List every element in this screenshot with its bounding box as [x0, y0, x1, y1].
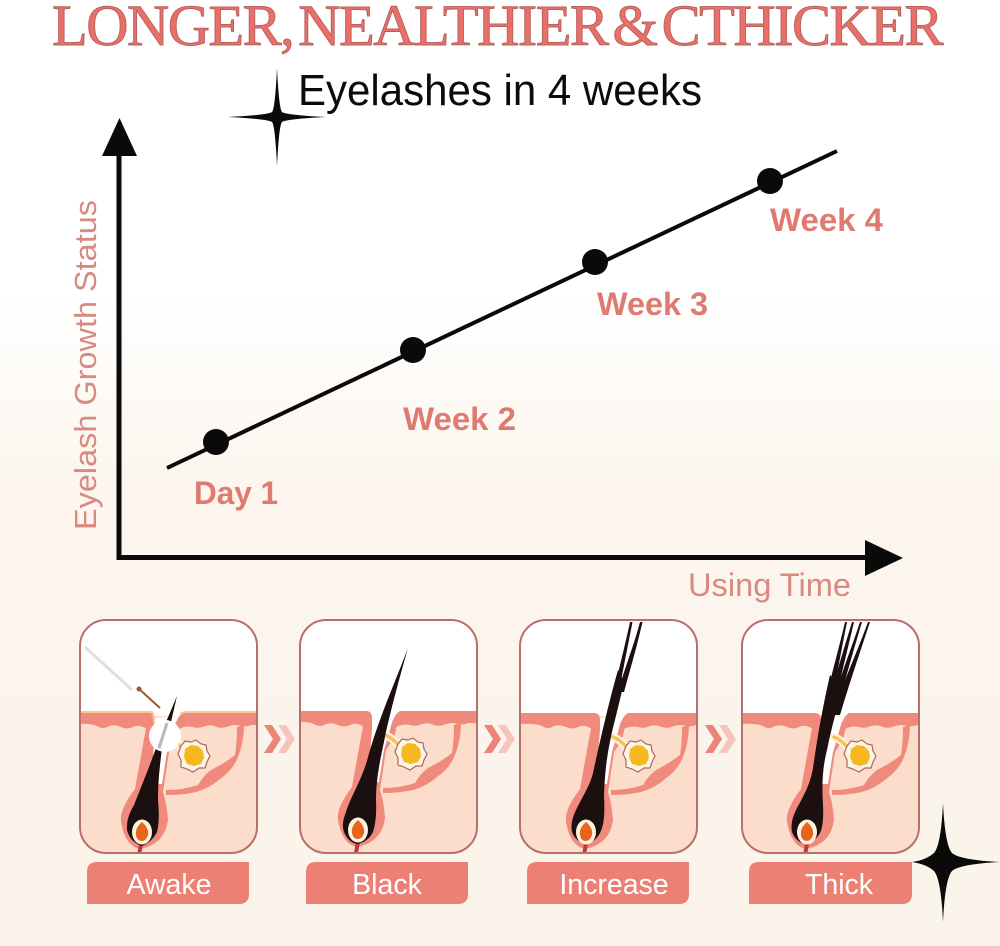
label: Black — [306, 862, 468, 904]
hair — [572, 622, 642, 844]
arrow: Awake to Black — [264, 725, 295, 753]
panel: Increase — [519, 619, 698, 854]
x axis label: Using Time — [688, 567, 851, 603]
label: Increase: Increase — [559, 869, 669, 901]
icon: sparkle near subtitle — [228, 68, 326, 166]
point: Week 3: Week 3 — [597, 286, 708, 322]
hair — [792, 622, 870, 844]
label: Awake: Awake — [126, 869, 212, 901]
label: Thick — [749, 862, 912, 904]
point: Week 4 — [757, 168, 883, 238]
trend line — [167, 151, 837, 468]
point: Week 3 — [582, 249, 708, 322]
point: Week 2: Week 2 — [403, 401, 516, 437]
line chart — [68, 118, 903, 603]
yellow halo on skin — [80, 712, 257, 724]
point: Day 1 — [194, 429, 278, 511]
point: Week 2 — [400, 337, 516, 437]
point: Day 1: Day 1 — [194, 475, 278, 511]
hair — [343, 648, 408, 844]
icon: sparkle bottom right — [912, 803, 1000, 922]
arrow: Black to Increase — [484, 725, 515, 753]
x axis arrow — [117, 540, 903, 576]
label: Black: Black — [352, 869, 423, 901]
panel: Awake — [79, 619, 258, 854]
arrow: Increase to Thick — [705, 725, 736, 753]
hair and applicator — [85, 647, 181, 846]
y axis arrow — [102, 118, 137, 560]
panel: Thick — [741, 619, 920, 854]
point: Week 4: Week 4 — [770, 202, 883, 238]
label: Increase — [527, 862, 689, 904]
y axis label: Eyelash Growth Status — [68, 200, 103, 530]
label: Thick: Thick — [805, 869, 874, 901]
subtitle: Eyelashes in 4 weeks — [298, 66, 702, 115]
label: Awake — [87, 862, 249, 904]
panel: Black — [299, 619, 478, 854]
